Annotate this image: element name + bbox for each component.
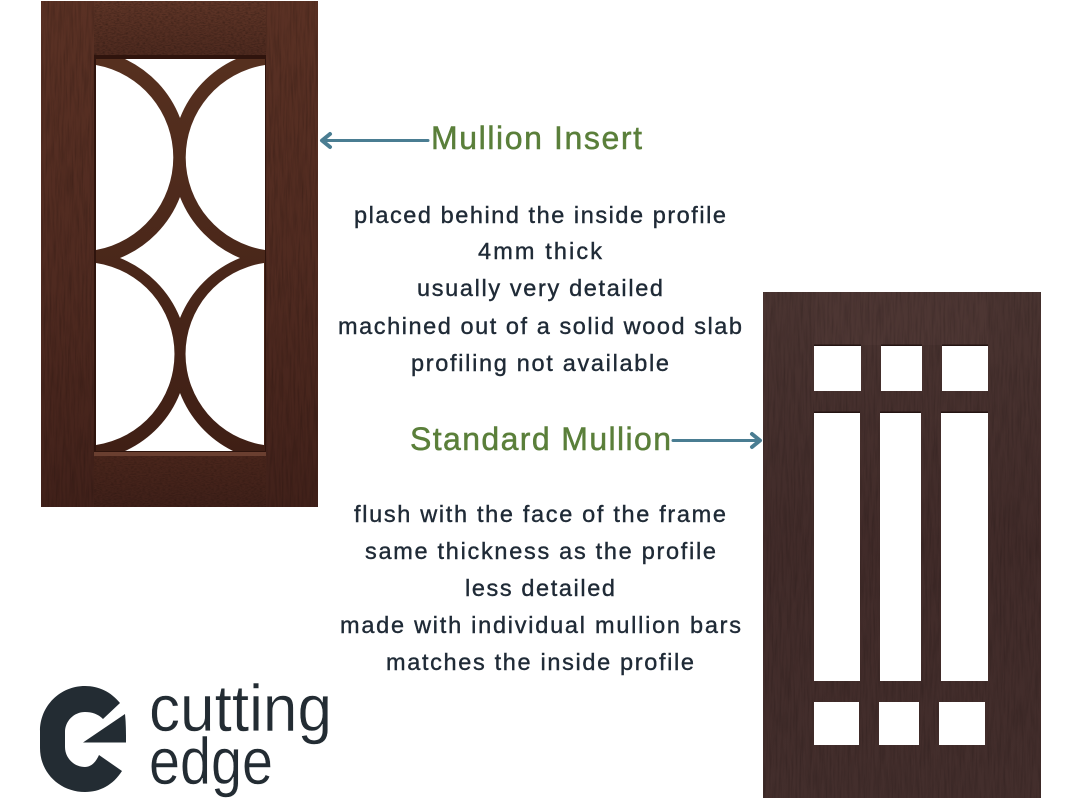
wood grain: right stile <box>266 1 318 507</box>
heading: standard mullion: Standard Mullion <box>410 421 671 457</box>
door frame <box>41 1 318 507</box>
text block: standard mullion features: flush with the face of the frame <box>354 501 726 527</box>
wood grain: bottom rail <box>94 455 266 507</box>
text block: standard mullion features: same thickness as the profile <box>365 538 716 564</box>
logo: cutting edge <box>40 671 332 798</box>
logo wordmark <box>149 671 332 798</box>
text block: standard mullion features <box>340 501 741 675</box>
wood grain: left stile <box>41 1 94 507</box>
text block: mullion insert features: machined out of a solid wood slab <box>338 313 742 339</box>
panel: standard mullion door <box>763 292 1041 798</box>
top rail highlight <box>814 292 988 345</box>
top rail <box>94 1 266 55</box>
window panes <box>814 344 988 745</box>
text block: standard mullion features: less detailed <box>465 575 615 601</box>
text block: mullion insert features: usually very detailed <box>417 275 663 301</box>
door frame <box>763 292 1041 798</box>
text block: mullion insert features <box>338 202 742 376</box>
text block: standard mullion features: matches the inside profile <box>386 649 694 675</box>
arrow: to standard mullion <box>673 434 760 447</box>
heading: mullion insert: Mullion Insert <box>431 120 642 156</box>
logo wordmark: edge <box>149 724 273 798</box>
wood grain: rails <box>94 1 266 55</box>
bottom rail <box>94 455 266 507</box>
text block: mullion insert features: 4mm thick <box>478 238 602 264</box>
logo wordmark: cutting <box>149 671 332 745</box>
mullion insert <box>94 55 266 456</box>
text block: standard mullion features: made with individual mullion bars <box>340 612 741 638</box>
logo mark <box>40 686 126 792</box>
text block: mullion insert features: placed behind the inside profile <box>354 202 726 228</box>
arrow: to mullion insert <box>322 134 428 147</box>
panel: mullion insert door <box>41 1 318 507</box>
wood grain: door <box>763 292 1041 798</box>
text block: mullion insert features: profiling not available <box>411 350 669 376</box>
